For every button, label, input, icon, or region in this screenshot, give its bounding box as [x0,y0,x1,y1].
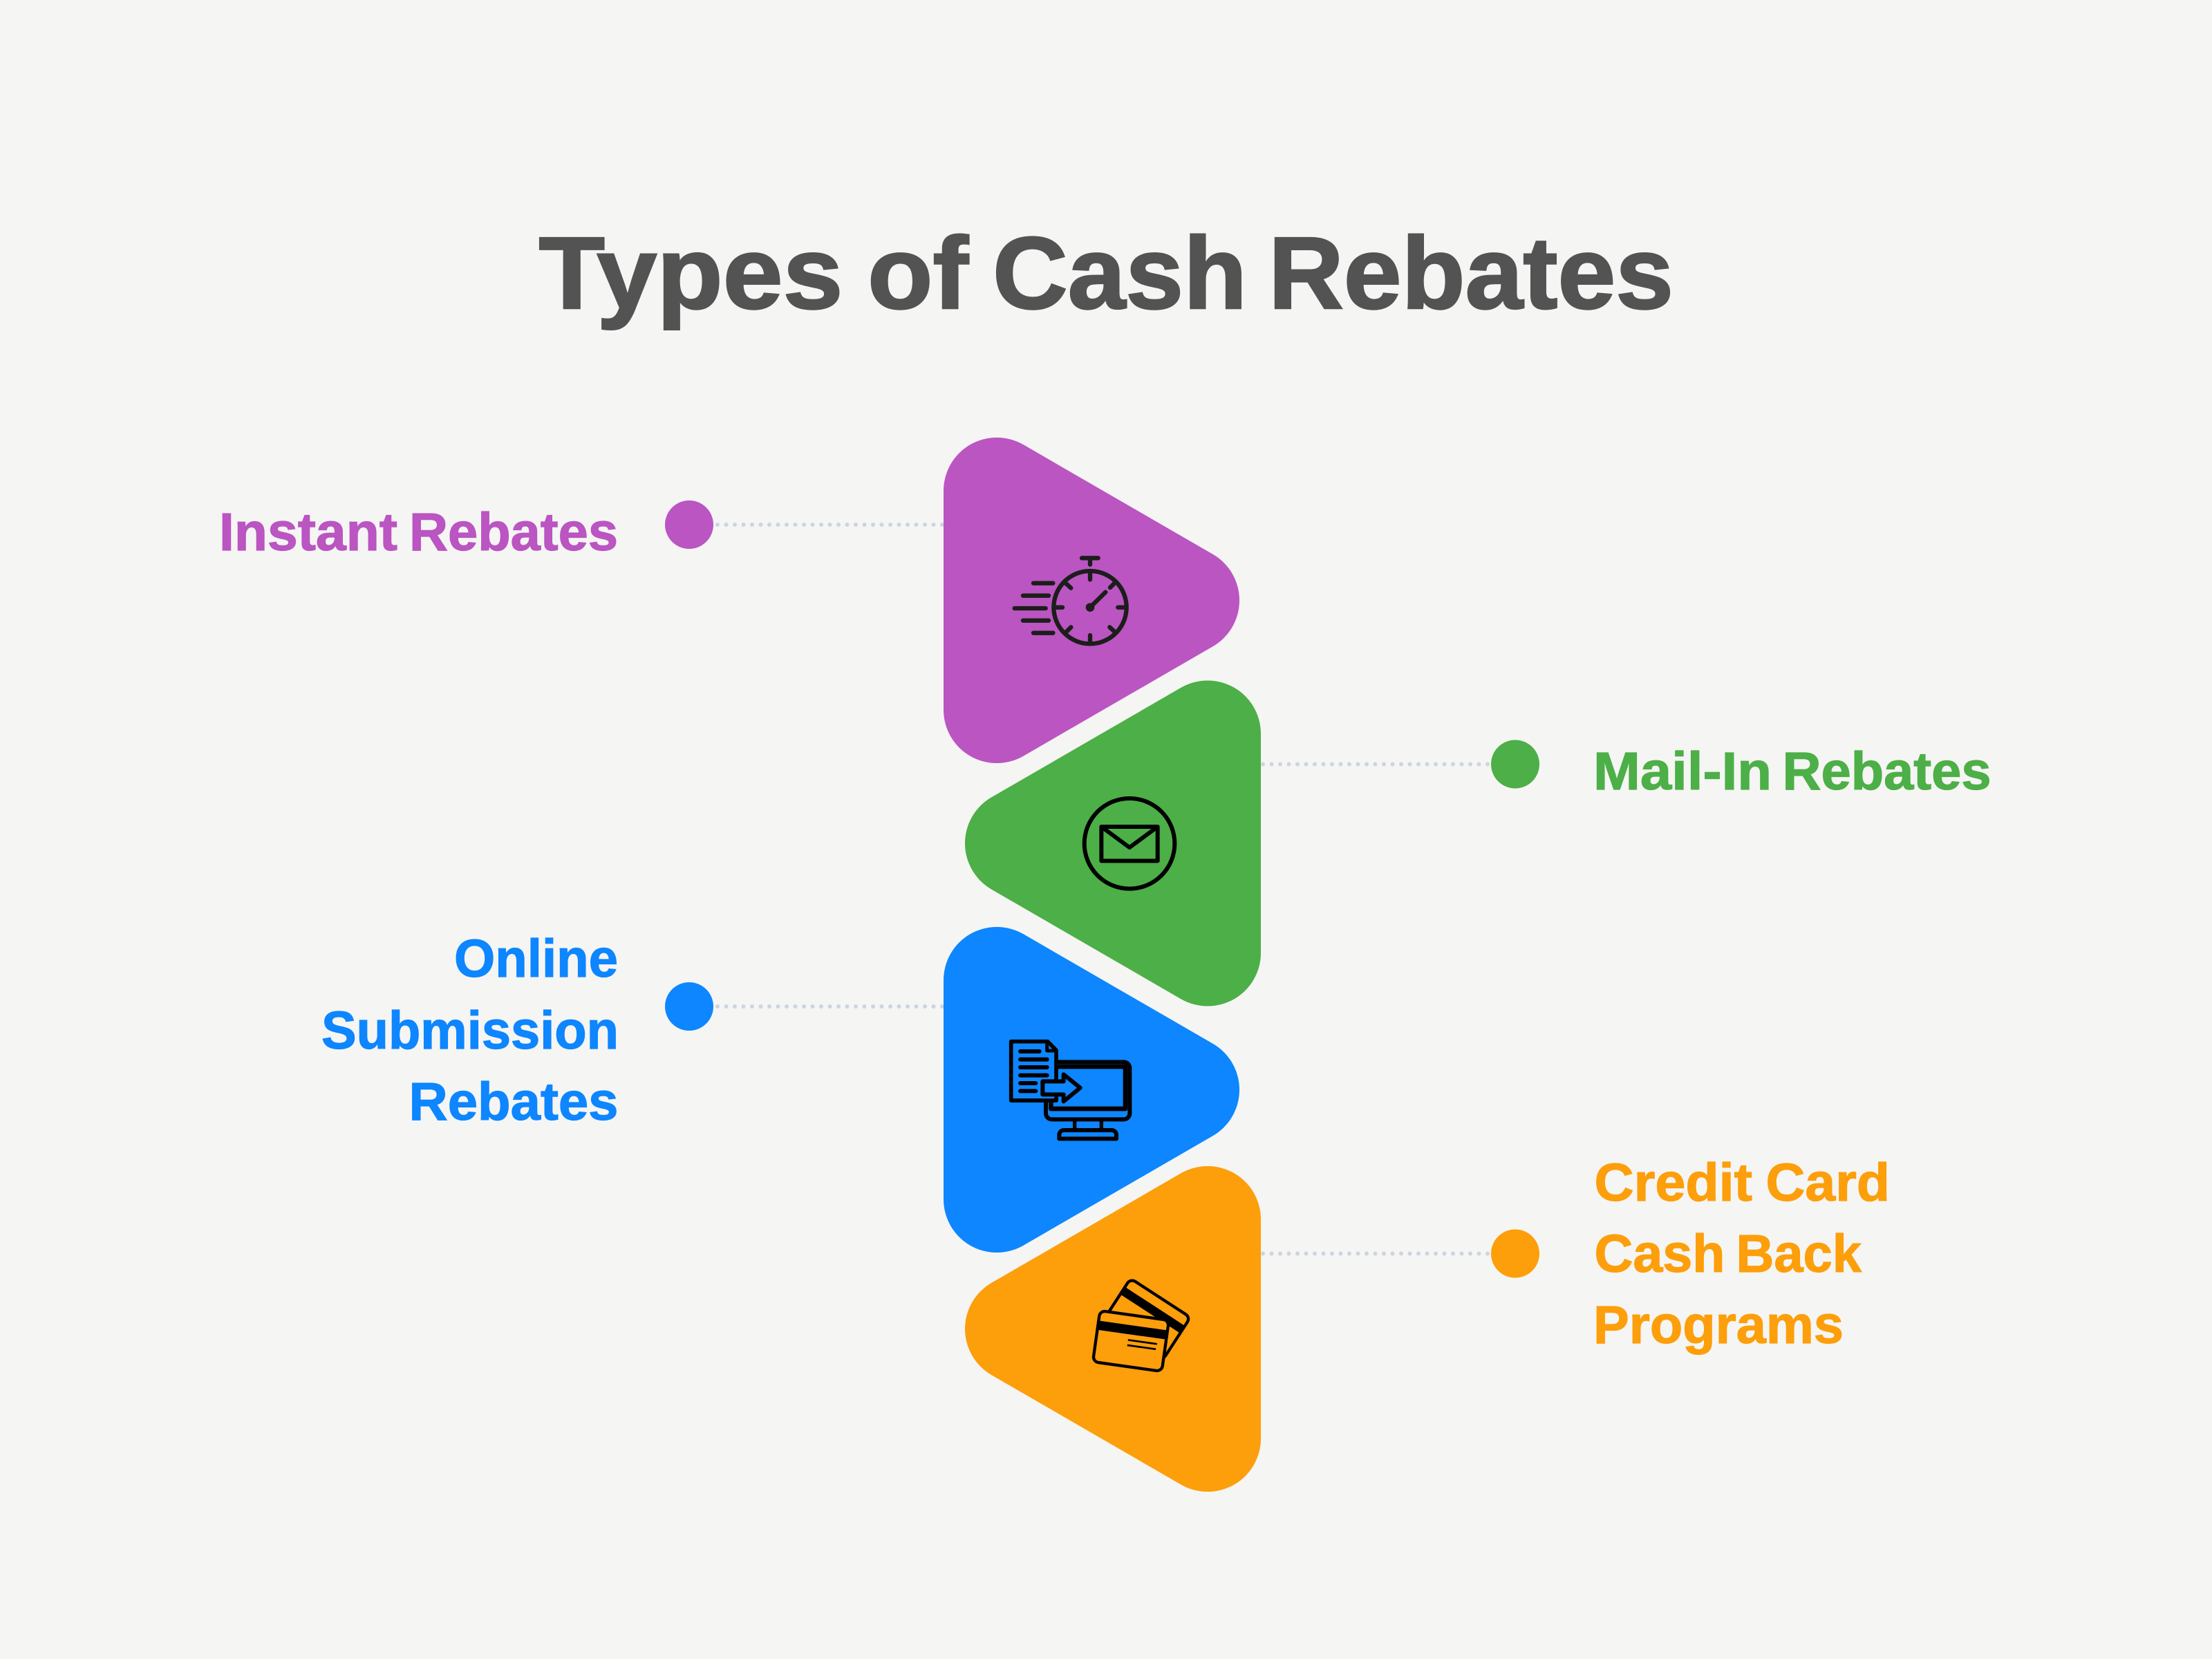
marker dot: instant rebates [665,500,713,549]
label: instant rebates: Rebates [409,503,618,562]
label: credit card cash back programs: Back [1736,1224,1862,1284]
panel: mail-in rebates triangle [965,680,1261,1006]
label: credit card cash back programs [1593,1153,1890,1355]
title: of [868,216,969,330]
label: online submission rebates: Rebates [409,1072,618,1132]
connector: mail-in rebates [1263,762,1490,766]
label: online submission rebates: Online [454,929,618,988]
label: credit card cash back programs: Credit [1594,1153,1752,1212]
label: instant rebates: Instant [219,503,397,562]
label: credit card cash back programs: Programs [1593,1295,1844,1355]
label: credit card cash back programs: Cash [1594,1224,1725,1284]
icon: envelope in circle [1085,798,1174,889]
label: mail-in rebates: Mail-In [1593,742,1772,801]
marker dot: online submission rebates [665,982,713,1031]
label: mail-in rebates [1593,742,1991,801]
connector: instant rebates [718,523,944,527]
icon: document sent to monitor [1011,1042,1130,1138]
icon: two credit cards [1093,1278,1190,1371]
marker dot: mail-in rebates [1491,740,1539,788]
label: instant rebates [219,503,618,562]
title: Rebates [1268,216,1674,330]
label: mail-in rebates: Rebates [1782,742,1991,801]
connector: online submission rebates [718,1004,944,1009]
label: credit card cash back programs: Card [1765,1153,1890,1212]
marker dot: credit card cash back programs [1491,1229,1539,1277]
panel: online submission rebates triangle [944,927,1239,1253]
panel: credit card cash back triangle [965,1166,1261,1492]
icon: stopwatch with speed lines [1015,558,1127,644]
connector: credit card cash back programs [1263,1251,1490,1255]
title: Cash [993,216,1247,330]
label: online submission rebates: Submission [321,1001,619,1060]
title [539,216,1674,330]
title: Types [539,216,843,330]
label: online submission rebates [321,929,619,1132]
panel: instant rebates triangle [944,438,1239,763]
